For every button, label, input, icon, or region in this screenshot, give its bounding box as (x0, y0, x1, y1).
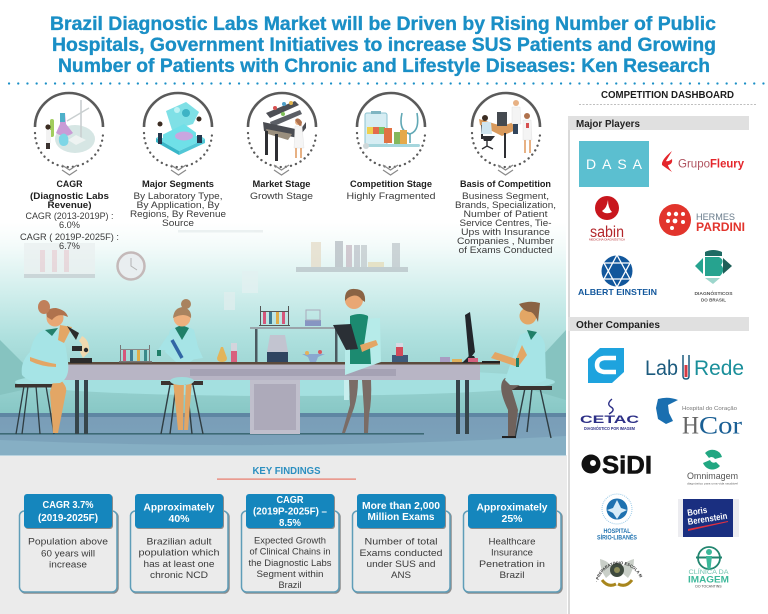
icon: chevrons (62, 165, 77, 175)
text: CAGR: 6.0% (59, 220, 80, 230)
text: competition stage (346, 179, 436, 201)
figure: scientist with clipboard (333, 289, 381, 433)
icon: wall clock (118, 252, 144, 280)
heading: other companies (568, 317, 749, 331)
text: major segments: Major Segments (142, 179, 214, 189)
icon: microscope (67, 326, 92, 363)
text: CAGR (20, 179, 119, 251)
logo: Boris Berenstein: Berenstein (687, 511, 728, 527)
heading: major players (568, 116, 749, 130)
text: market stage: Growth Stage (250, 191, 313, 201)
logo: Omnimagem: Omnimagem (687, 471, 738, 482)
text: basis of competition: Business Segment, (462, 191, 549, 201)
heading: other companies: Other Companies (576, 320, 660, 331)
card: total exams: Million Exams (368, 512, 435, 523)
figure: scientist at computer (491, 302, 552, 438)
card: clinical chains: Brazil (278, 580, 302, 590)
card: healthcare insurance: Insurance (491, 548, 533, 558)
logo: LabRede: Lab (645, 357, 678, 380)
logo: sabin: MEDICINA DIAGNÓSTICA (589, 236, 625, 242)
icon: chevrons (274, 165, 289, 175)
logo: DASA (579, 141, 649, 187)
logo: Hermes Pardini (659, 204, 745, 236)
text: market stage (250, 179, 313, 201)
text: major segments: By Application, By (136, 200, 220, 210)
icon: chevrons (383, 165, 398, 175)
card: chronic NCD: chronic NCD (150, 570, 208, 580)
figure: scientist at microscope (15, 300, 72, 434)
text: basis of competition: Service Centres, Tie- (460, 218, 552, 228)
table (47, 362, 500, 434)
logo: CETAC: DIAGNÓSTICO POR IMAGEM (584, 426, 635, 431)
icon: computer monitor (440, 312, 500, 363)
card: clinical chains: Expected Growth (254, 536, 326, 546)
card: chronic NCD: Approximately (144, 502, 215, 514)
card: clinical chains: of Clinical Chains in (250, 546, 331, 556)
logo: LabRede: Rede (694, 357, 744, 380)
logo: sabin: sabin (590, 224, 624, 241)
logo: CEPE badge (596, 559, 642, 587)
logo: CETAC: CETAC (580, 414, 639, 426)
text: basis of competition: Brands, Specialization, (455, 200, 556, 210)
card: clinical chains (242, 494, 339, 592)
logo: Clinica da Imagem (688, 547, 729, 588)
card: healthcare insurance: Penetration in (479, 559, 545, 569)
panel: laboratory scene (0, 222, 566, 455)
icon: competition desk circle (472, 93, 540, 167)
logo: Omnimagem (687, 450, 738, 486)
text: major segments: Source (162, 218, 194, 228)
card: healthcare insurance: Brazil (500, 570, 525, 580)
logo: Albert Einstein: ALBERT EINSTEIN (578, 287, 657, 297)
card: healthcare insurance (464, 494, 561, 592)
figure: scientist with pipette (157, 299, 203, 434)
text: basis of competition: Number of Patient (464, 209, 548, 219)
icon: clipboard and stethoscope circle (357, 93, 425, 167)
logo: HCor: Hospital do Coração (682, 406, 737, 412)
heading: major players: Major Players (576, 119, 640, 130)
card: total exams: More than 2,000 (362, 501, 440, 512)
text: competition stage: Highly Fragmented (346, 191, 436, 201)
logo: Grupo Fleury (662, 151, 744, 172)
text: CAGR: Revenue) (48, 200, 92, 210)
icon: segments analyser circle (144, 93, 212, 167)
logo: sabin (589, 196, 625, 242)
text: CAGR: CAGR ( 2019P-2025F) : (20, 232, 119, 242)
logo: DASA: DASA (586, 156, 643, 172)
icon: red bottle on hotplate (392, 343, 408, 362)
card: clinical chains: CAGR (276, 495, 304, 506)
text: basis of competition: Companies , Number (457, 236, 554, 246)
logo: HCor: H (682, 412, 699, 440)
card: population: Population above (28, 536, 108, 546)
logo: Hospital Sirio-Libanes (597, 494, 637, 542)
logo: HCor: Cor (699, 412, 743, 440)
text: major segments: By Laboratory Type, (134, 191, 222, 201)
logo: Diagnosticos do Brasil: DO BRASIL (701, 298, 726, 304)
title: Number of Patients with Chronic and Lifestyle Diseases: Ken Research (58, 55, 710, 77)
card: total exams: under SUS and (366, 559, 436, 569)
icon: market stage workbench circle (248, 93, 316, 167)
logo: Clinica da Imagem: DO TOCANTINS (695, 584, 722, 588)
icon: test tube rack (119, 345, 152, 362)
card: population: CAGR 3.7% (42, 500, 94, 511)
logo: Diagnosticos do Brasil: DIAGNÓSTICOS (694, 289, 733, 297)
card: healthcare insurance: 25% (502, 514, 523, 525)
card: chronic NCD: Brazilian adult (146, 536, 212, 546)
heading: competition dashboard: COMPETITION DASHBOARD (601, 89, 734, 101)
card: total exams: Number of total (364, 536, 438, 546)
logo: SIDI (582, 452, 652, 480)
card: population: (2019-2025F) (38, 513, 98, 524)
icon: shelf with equipment (250, 306, 338, 362)
card: healthcare insurance: Approximately (476, 502, 548, 514)
heading: key findings: KEY FINDINGS (252, 466, 321, 477)
card: total exams: ANS (391, 570, 411, 580)
card: chronic NCD: has at least one (144, 559, 215, 569)
text: CAGR: (Diagnostic Labs (30, 191, 109, 201)
logo: SIDI: SiDI (602, 452, 652, 480)
logo: Omnimagem: diagnóstico para uma vida saudável (687, 482, 738, 486)
title: Brazil Diagnostic Labs Market will be Driven by Rising Number of Public (50, 13, 716, 35)
card: clinical chains: 8.5% (279, 518, 301, 529)
card: clinical chains: (2019P-2025F) – (253, 506, 327, 518)
logo: LabRede (645, 355, 744, 380)
card: chronic NCD (130, 494, 228, 592)
text: CAGR: 6.7% (59, 241, 80, 251)
card: population: increase (49, 560, 87, 570)
card: chronic NCD: 40% (168, 514, 190, 525)
logo: Grupo Fleury: Fleury (710, 156, 744, 170)
text: CAGR: CAGR (2013-2019P) : (26, 211, 114, 221)
text: basis of competition: of Exams Conducted (458, 245, 553, 255)
icon: chevrons (498, 165, 513, 175)
text: market stage: Market Stage (252, 179, 311, 189)
card: total exams (352, 494, 450, 592)
text: basis of competition: Ups with Insurance (461, 227, 550, 237)
heading: key findings (217, 466, 356, 480)
card: healthcare insurance: Healthcare (488, 536, 536, 546)
logo: Boris Berenstein (678, 499, 739, 537)
text: basis of competition: Basis of Competition (460, 179, 551, 189)
logo: Boris Berenstein: Boris (687, 505, 708, 518)
logo: HCor (656, 398, 743, 440)
icon: flask and cylinder (217, 343, 237, 362)
logo: Hospital Sirio-Libanes: HOSPITAL (604, 529, 631, 535)
logo: Albert Einstein (578, 255, 657, 297)
logo: C blue mark (588, 348, 624, 383)
text: major segments: Regions, By Revenue (130, 209, 226, 219)
logo: Grupo Fleury: Grupo (678, 156, 710, 170)
card: population: 60 years will (41, 548, 95, 558)
text: CAGR: CAGR (56, 179, 83, 189)
title (50, 13, 716, 77)
text: basis of competition (455, 179, 556, 255)
text: competition stage: Competition Stage (350, 179, 432, 189)
logo: Hermes Pardini: HERMES (696, 212, 735, 223)
card: population (20, 494, 117, 592)
logo: CEPE badge: CEPE · PREPARATÓRIO ESCOLA MILITAR (596, 561, 642, 582)
icon: lab glassware circle (35, 93, 103, 167)
logo: CETAC (580, 399, 639, 431)
wall decor (24, 230, 408, 310)
logo: Clinica da Imagem: IMAGEM (688, 574, 729, 586)
card: clinical chains: the Diagnostic Labs (248, 558, 332, 568)
card: total exams: Exams conducted (360, 548, 443, 558)
card: chronic NCD: population which (138, 548, 220, 558)
panel: key findings background (0, 455, 567, 614)
logo: Hermes Pardini: PARDINI (696, 222, 745, 234)
text: major segments (130, 179, 226, 228)
card: clinical chains: Segment within (256, 569, 324, 579)
title: Hospitals, Government Initiatives to increase SUS Patients and Growing (52, 34, 716, 56)
logo: Diagnosticos do Brasil (694, 250, 733, 304)
logo: Clinica da Imagem: CLÍNICA DA (688, 569, 728, 576)
icon: chevrons (171, 165, 186, 175)
logo: Hospital Sirio-Libanes: SÍRIO-LIBANÊS (597, 534, 637, 542)
